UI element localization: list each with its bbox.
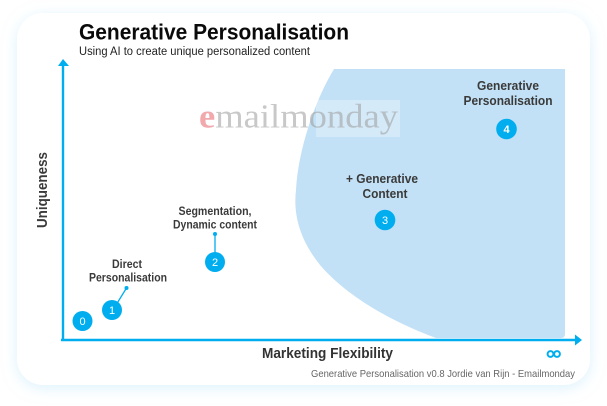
marker 4: generative personalisation: 4 [503, 124, 510, 136]
marker 4: generative personalisation: Generative [477, 78, 539, 93]
x axis label: Marketing Flexibility [262, 345, 394, 362]
footer credit: Generative Personalisation v0.8 Jordie van Rijn - Emailmonday [311, 368, 576, 380]
y axis arrow [58, 59, 69, 341]
marker 4: generative personalisation: Personalisation [464, 93, 553, 108]
marker 1: direct personalisation: 1 [109, 305, 115, 317]
watermark: emailmonday: emailmonday [199, 98, 398, 136]
y axis label: Uniqueness [35, 152, 51, 228]
infinity symbol [548, 351, 560, 357]
marker 2: segmentation: Segmentation, [178, 206, 252, 218]
marker 4: generative personalisation [464, 78, 553, 139]
marker 2: segmentation: Dynamic content [173, 220, 257, 232]
marker 3: generative content: 3 [382, 215, 388, 227]
marker 1: direct personalisation: Direct [112, 259, 142, 271]
title: Generative Personalisation [79, 20, 349, 44]
shaded region: generative zone [295, 69, 565, 338]
marker 3: generative content: Content [362, 186, 408, 201]
marker 3: generative content [346, 171, 418, 230]
subtitle: Using AI to create unique personalized content [79, 46, 311, 58]
x axis arrow [61, 334, 582, 346]
marker 1: direct personalisation [89, 259, 167, 320]
marker 0 [72, 311, 92, 331]
marker 2: segmentation: 2 [212, 257, 218, 269]
marker 2: segmentation [173, 206, 257, 272]
marker 1: direct personalisation: Personalisation [89, 272, 167, 284]
marker 0: 0 [79, 316, 86, 328]
marker 3: generative content: + Generative [346, 171, 418, 186]
